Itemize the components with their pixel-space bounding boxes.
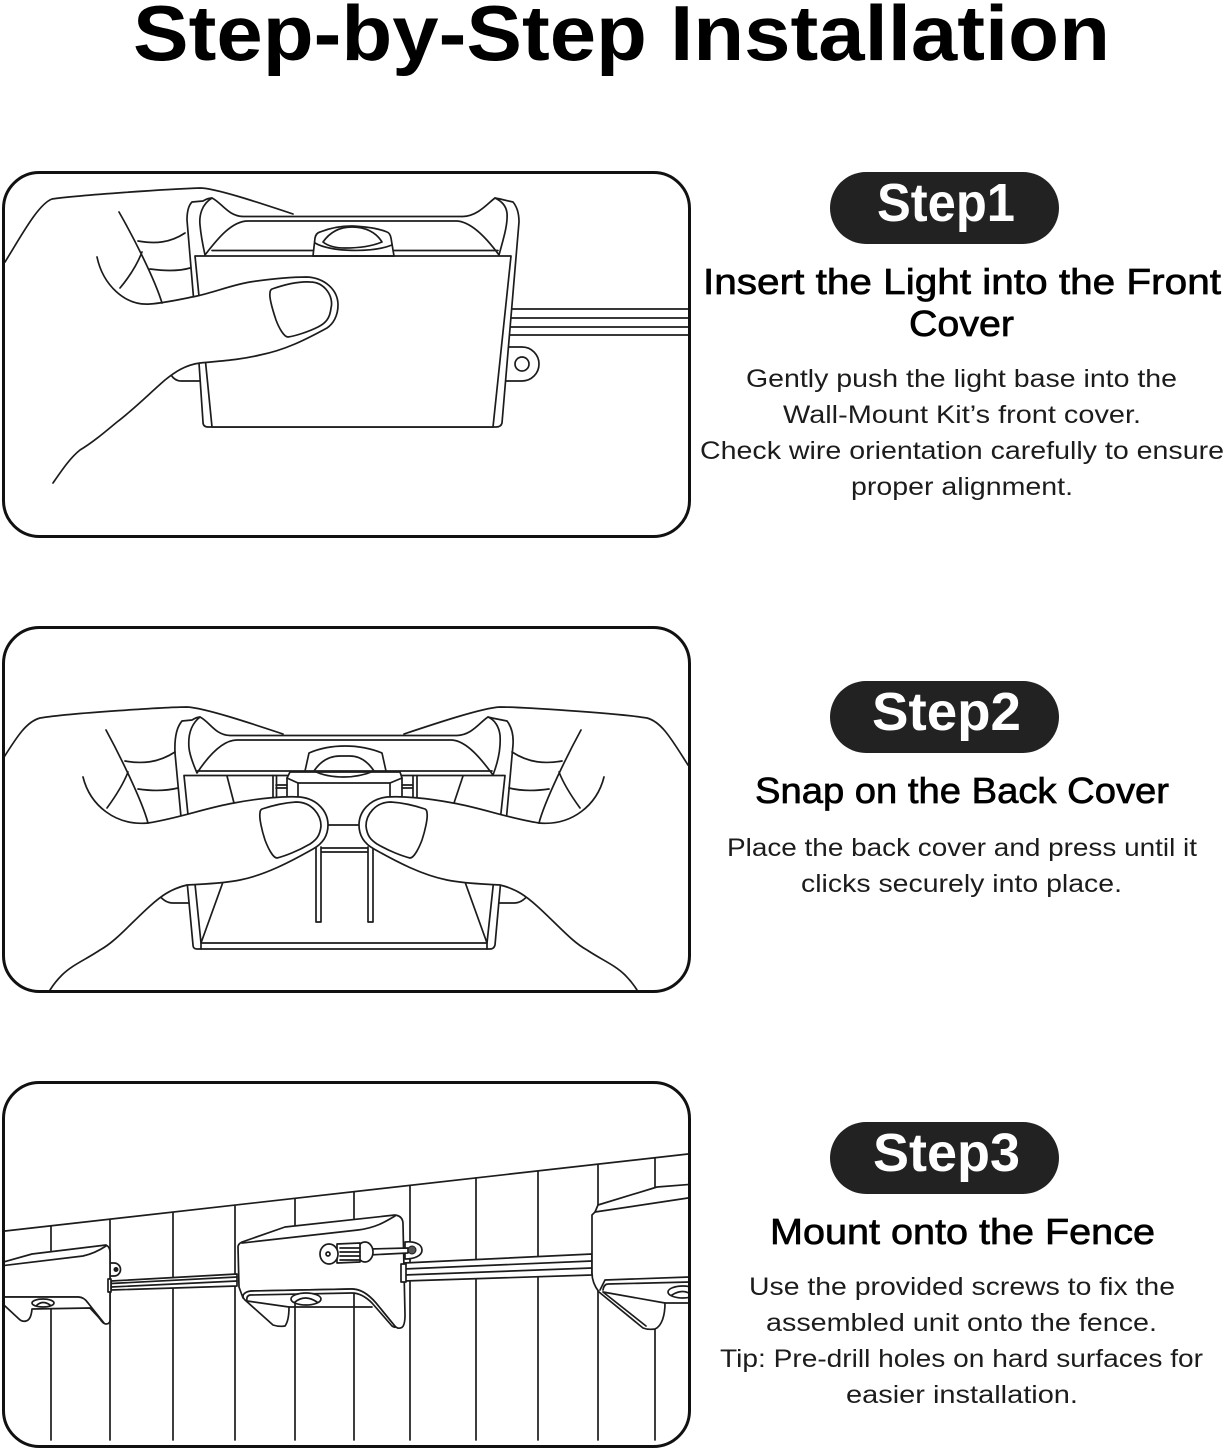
- text block: step 2 description: [727, 834, 1197, 898]
- back cover posts: [316, 825, 373, 922]
- wires: [505, 309, 690, 335]
- heading: step 1: Insert the Light into the Front: [703, 261, 1221, 302]
- heading: step 2: Snap on the Back Cover: [755, 770, 1169, 811]
- right hand: [359, 707, 688, 990]
- text block: step 1 description: Gently push the light base into the: [746, 365, 1177, 393]
- panel: step 2 illustration: [0, 628, 690, 992]
- text block: step 2 description: clicks securely into place.: [801, 870, 1122, 898]
- wire between center and right units: [401, 1254, 592, 1282]
- mounting tab: [505, 347, 539, 381]
- lens: [305, 746, 386, 777]
- center clip block: [273, 772, 417, 798]
- text block: step 1 description: Wall-Mount Kit’s front cover.: [783, 401, 1141, 429]
- heading: step 1: Cover: [909, 303, 1014, 344]
- heading: step 3: Mount onto the Fence: [770, 1211, 1155, 1252]
- panel: step 1 illustration: [4, 172, 690, 536]
- left tab: [171, 375, 205, 381]
- fingernail: [270, 282, 332, 337]
- text block: step 2 description: Place the back cover and press until it: [727, 834, 1197, 862]
- heading: step 1: [703, 261, 1221, 344]
- center light unit: [238, 1215, 422, 1328]
- text block: step 3 description: Tip: Pre-drill holes on hard surfaces for: [720, 1345, 1203, 1373]
- left light unit: [0, 1245, 120, 1324]
- hand: [5, 188, 338, 483]
- screwdriver and screw: [320, 1242, 416, 1264]
- lens: [313, 226, 394, 256]
- fence: [5, 1154, 688, 1440]
- text block: step 3 description: assembled unit onto the fence.: [766, 1309, 1157, 1337]
- right light unit: [592, 1184, 698, 1329]
- pill: step 1: [830, 172, 1059, 244]
- left hand: [0, 707, 328, 990]
- text block: step 1 description: proper alignment.: [851, 473, 1073, 501]
- side tabs: [160, 897, 526, 904]
- text block: step 3 description: Use the provided screws to fix the: [749, 1273, 1175, 1301]
- pill: step 2: Step2: [872, 682, 1021, 742]
- wire between left and center units: [108, 1274, 237, 1292]
- pill: step 2: [830, 681, 1059, 753]
- text block: step 3 description: [720, 1273, 1203, 1409]
- panel: step 3 illustration: [0, 1082, 698, 1446]
- light housing: [175, 717, 513, 949]
- pill: step 1: Step1: [877, 173, 1015, 233]
- light housing: [187, 198, 519, 427]
- text block: step 1 description: [700, 365, 1224, 501]
- pill: step 3: [830, 1122, 1059, 1194]
- text block: step 3 description: easier installation.: [846, 1381, 1078, 1409]
- text block: step 1 description: Check wire orientation carefully to ensure: [700, 437, 1224, 465]
- pill: step 3: Step3: [873, 1123, 1020, 1183]
